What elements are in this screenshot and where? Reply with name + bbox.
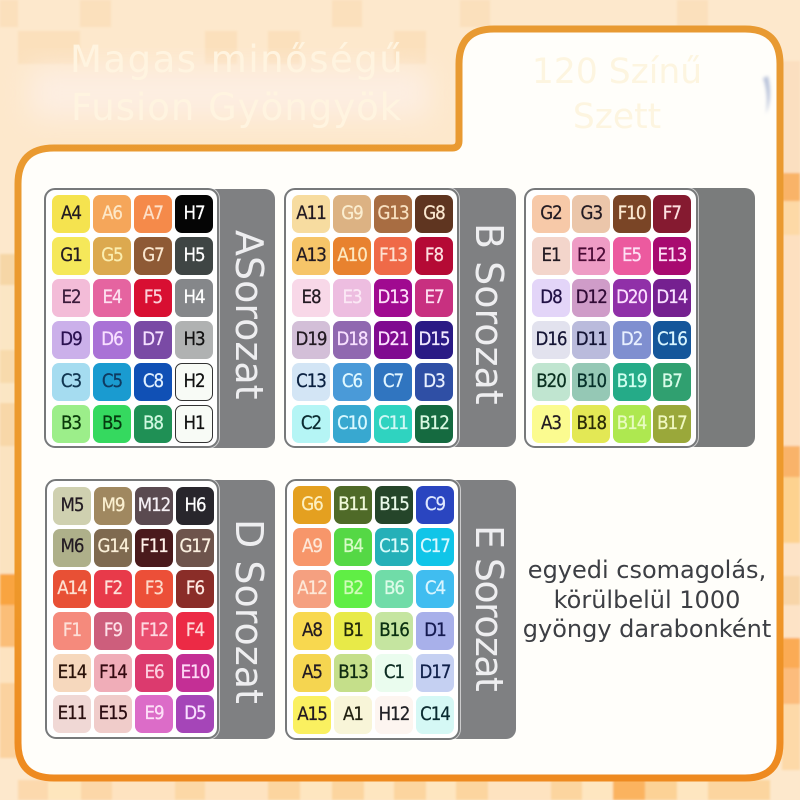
swatch grid: C series: F10 xyxy=(618,203,645,224)
swatch grid: D series: D5 xyxy=(184,703,206,724)
panel: E series swatches card xyxy=(285,479,460,740)
swatch grid: A series: C8 xyxy=(143,371,163,392)
swatch grid: A series: H4 xyxy=(183,287,205,308)
swatch grid: B series: C6 xyxy=(342,371,362,392)
swatch grid: E series: A12 xyxy=(297,578,327,599)
text block: packaging note: gyöngy darabonként xyxy=(523,615,771,643)
swatch grid: A series: E2 xyxy=(61,287,81,308)
swatch grid: E series: C1 xyxy=(384,662,404,683)
swatch grid: A series: G7 xyxy=(142,245,164,266)
swatch grid: E series: A9 xyxy=(302,536,322,557)
swatch grid: C series: D14 xyxy=(656,287,687,308)
swatch grid: A series xyxy=(52,195,213,443)
swatch grid: D series: E14 xyxy=(58,662,86,682)
swatch grid: B series: D15 xyxy=(418,329,450,350)
swatch grid: D series: E10 xyxy=(181,662,209,682)
panel: E series backing xyxy=(430,480,516,739)
swatch grid: B series: C10 xyxy=(337,413,367,434)
swatch grid: B series xyxy=(292,195,453,443)
swatch grid: D series: F14 xyxy=(99,662,127,682)
swatch grid: C series: B18 xyxy=(576,413,606,434)
swatch grid: C series: D20 xyxy=(616,287,647,308)
swatch grid: C series: E5 xyxy=(622,245,641,266)
text block: packaging note: egyedi csomagolás, xyxy=(528,556,766,584)
swatch grid: E series: D1 xyxy=(424,620,446,641)
swatch grid: C series: B19 xyxy=(617,371,646,392)
swatch grid: A series: D9 xyxy=(60,329,82,350)
swatch grid: E series: C17 xyxy=(420,536,450,557)
swatch grid: A series: G1 xyxy=(60,245,82,266)
swatch grid: A series: A4 xyxy=(61,203,81,224)
swatch grid: B series: D19 xyxy=(296,329,326,350)
label: B series: B Sorozat xyxy=(467,223,511,405)
swatch grid: A series: A7 xyxy=(143,203,163,224)
swatch grid: E series: C9 xyxy=(425,494,445,515)
swatch grid: C series: B17 xyxy=(657,413,687,434)
heading: Magas minőségű Fusion Gyöngyök xyxy=(70,38,404,129)
label: E series: E Sorozat xyxy=(467,525,511,690)
label: A series: ASorozat xyxy=(227,230,271,400)
panel: A series backing xyxy=(190,189,275,448)
swatch grid: A series: H2 xyxy=(183,371,205,392)
swatch grid: E series: G6 xyxy=(301,494,323,515)
swatch grid: E series: B2 xyxy=(343,578,363,599)
swatch grid: D series: E11 xyxy=(58,703,86,724)
swatch grid: A series: H1 xyxy=(183,413,205,434)
swatch grid: A series: A6 xyxy=(102,203,122,224)
swatch grid: A series: B8 xyxy=(143,413,163,434)
swatch grid: B series: D18 xyxy=(336,329,368,350)
heading: 120 Színű Szett: Szett xyxy=(573,97,661,137)
swatch grid: C series: E12 xyxy=(577,245,606,266)
swatch grid: A series: H7 xyxy=(183,203,205,224)
swatch grid: E series: C15 xyxy=(379,536,409,557)
swatch grid: D series: E6 xyxy=(144,662,164,682)
panel: C series backing (unlabelled) xyxy=(670,188,755,447)
swatch grid: B series: D21 xyxy=(378,329,408,350)
swatch grid: C series: D11 xyxy=(576,329,607,350)
swatch grid: B series: D3 xyxy=(423,371,445,392)
swatch grid: D series: F2 xyxy=(104,578,122,599)
swatch grid: C series: A3 xyxy=(541,413,561,434)
panel: A series swatches card xyxy=(44,188,219,448)
swatch grid: C series: C16 xyxy=(657,329,687,350)
swatch grid: A series: H5 xyxy=(183,245,205,266)
swatch grid: C series: E1 xyxy=(541,245,561,266)
swatch grid: E series: A8 xyxy=(302,620,322,641)
text block: packaging note: körülbelül 1000 xyxy=(554,586,740,614)
swatch grid: D series: F9 xyxy=(104,620,122,641)
swatch grid: B series: E7 xyxy=(424,287,444,308)
swatch grid: E series: B6 xyxy=(384,578,404,599)
swatch grid: C series: B14 xyxy=(617,413,646,434)
swatch grid: A series: B3 xyxy=(61,413,81,434)
swatch grid: D series: F3 xyxy=(145,578,163,599)
swatch grid: C series: B20 xyxy=(536,371,566,392)
swatch grid: C series: D2 xyxy=(621,329,642,350)
swatch grid: C series: F7 xyxy=(663,203,681,224)
swatch grid: E series: B11 xyxy=(338,494,368,515)
swatch grid: A series: D7 xyxy=(142,329,164,350)
panel: C series swatches card xyxy=(524,188,698,448)
swatch grid: D series xyxy=(53,487,214,733)
swatch grid: A series: G5 xyxy=(101,245,123,266)
swatch grid: A series: F5 xyxy=(144,287,162,308)
swatch grid: C series: D16 xyxy=(536,329,566,350)
swatch grid: C series xyxy=(532,195,691,443)
heading: 120 Színű Szett xyxy=(532,52,702,137)
swatch grid: D series: F11 xyxy=(140,536,168,557)
swatch grid: D series: E15 xyxy=(99,703,127,724)
swatch grid: B series: C2 xyxy=(301,413,321,434)
swatch grid: A series: H3 xyxy=(183,329,205,350)
text block: packaging note xyxy=(523,556,771,643)
swatch grid: E series: B13 xyxy=(338,662,368,683)
swatch grid: B series: D13 xyxy=(378,287,408,308)
swatch grid: E series: A1 xyxy=(343,704,363,725)
swatch grid: B series: A13 xyxy=(296,245,326,266)
swatch grid: D series: F12 xyxy=(140,620,168,641)
swatch grid: C series: G2 xyxy=(540,203,562,224)
swatch grid: E series: C14 xyxy=(420,704,450,725)
swatch grid: A series: C3 xyxy=(61,371,81,392)
swatch grid: C series: E13 xyxy=(658,245,686,266)
swatch grid: D series: F6 xyxy=(186,578,204,599)
panel: B series swatches card xyxy=(284,188,459,448)
swatch grid: E series: H12 xyxy=(379,704,409,725)
swatch grid: B series: C13 xyxy=(296,371,326,392)
heading: 120 Színű Szett: 120 Színű xyxy=(532,52,702,92)
heading: Magas minőségű Fusion Gyöngyök: Fusion Gyöngyök xyxy=(71,86,402,129)
swatch grid: B series: C7 xyxy=(383,371,403,392)
swatch grid: D series: M12 xyxy=(138,495,170,516)
swatch grid: B series: F8 xyxy=(425,245,443,266)
panel: B series backing xyxy=(430,188,516,447)
swatch grid: D series: G17 xyxy=(179,536,211,557)
swatch grid: D series: M9 xyxy=(102,495,124,516)
swatch grid: D series: H6 xyxy=(184,495,206,516)
swatch grid: A series: D6 xyxy=(101,329,123,350)
swatch grid: B series: G13 xyxy=(377,203,409,224)
heading: Magas minőségű Fusion Gyöngyök: Magas minőségű xyxy=(70,38,404,81)
swatch grid: B series: E8 xyxy=(301,287,321,308)
swatch grid: B series: G9 xyxy=(341,203,363,224)
swatch grid: B series: G8 xyxy=(423,203,445,224)
swatch grid: A series: B5 xyxy=(102,413,122,434)
swatch grid: E series: A15 xyxy=(297,704,327,725)
swatch grid: B series: A10 xyxy=(337,245,367,266)
panel: D series backing xyxy=(190,480,275,739)
swatch grid: E series: D17 xyxy=(420,662,450,683)
swatch grid: C series: D12 xyxy=(576,287,607,308)
swatch grid: E series: B15 xyxy=(379,494,409,515)
swatch grid: B series: B12 xyxy=(419,413,449,434)
swatch grid: B series: C11 xyxy=(378,413,408,434)
panel: D series swatches card xyxy=(45,479,219,739)
swatch grid: A series: C5 xyxy=(102,371,122,392)
swatch grid: B series: E3 xyxy=(342,287,362,308)
swatch grid: E series: B4 xyxy=(343,536,363,557)
swatch grid: D series: F1 xyxy=(63,620,81,641)
swatch grid: D series: M5 xyxy=(61,495,83,516)
swatch grid: C series: D8 xyxy=(540,287,562,308)
label: D series: D Sorozat xyxy=(227,519,271,704)
swatch grid: A series: E4 xyxy=(102,287,122,308)
swatch grid: C series: G3 xyxy=(581,203,602,224)
swatch grid: E series: C4 xyxy=(425,578,445,599)
swatch grid: D series: A14 xyxy=(57,578,87,599)
swatch grid: E series: B16 xyxy=(379,620,409,641)
swatch grid: D series: M6 xyxy=(61,536,83,557)
swatch grid: E series: A5 xyxy=(302,662,322,683)
swatch grid: B series: A11 xyxy=(296,203,326,224)
swatch grid: D series: G14 xyxy=(97,536,129,557)
swatch grid: C series: B10 xyxy=(576,371,606,392)
swatch grid: E series: B1 xyxy=(343,620,363,641)
swatch grid: E series xyxy=(293,486,454,734)
swatch grid: B series: F13 xyxy=(379,245,407,266)
swatch grid: D series: E9 xyxy=(144,703,164,724)
swatch grid: C series: B7 xyxy=(662,371,682,392)
swatch grid: D series: F4 xyxy=(186,620,204,641)
